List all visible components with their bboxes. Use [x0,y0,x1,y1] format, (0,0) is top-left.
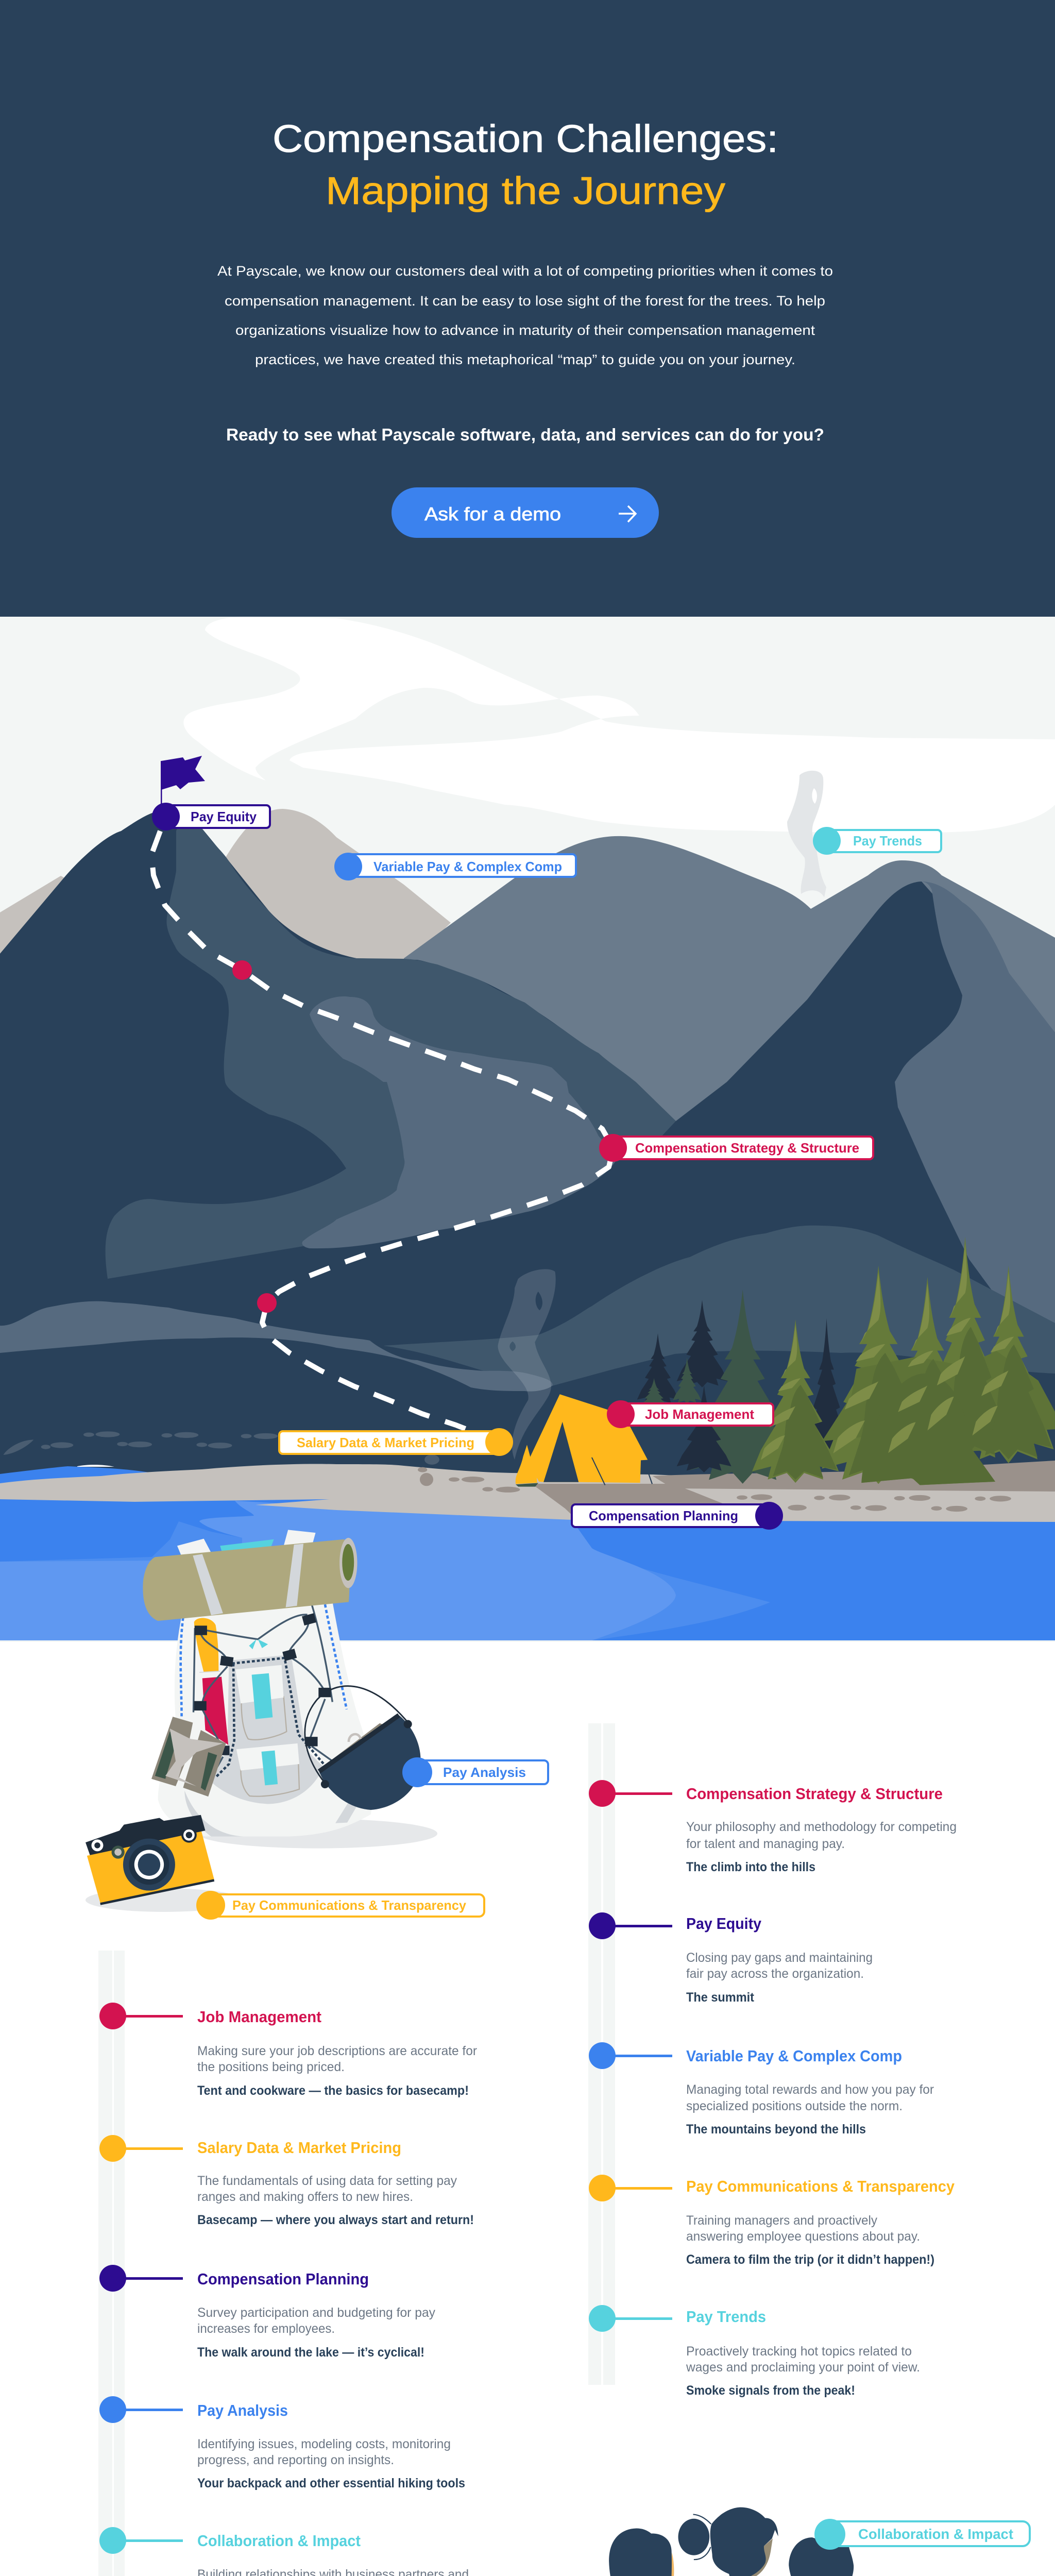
tan peak [206,809,451,969]
mid hill behind forest [383,1226,1055,1386]
center neck [720,2538,773,2576]
label: Pay Analysis: Pay Analysis [443,1765,526,1780]
footprints on dark ground [4,1431,439,1465]
item: Pay Equity: fair pay across the organization. [686,1967,864,1981]
label: Compensation Strategy [599,1134,873,1162]
demo button [392,487,659,538]
shore [0,1464,1055,1522]
left dark mountain [0,810,676,1494]
label: Compensation Strategy: Compensation Strategy & Structure [635,1140,859,1156]
olive pines [752,1236,1054,1485]
label: Salary Data [279,1428,513,1456]
side strap [184,1791,359,1837]
camp ground patch [532,1484,731,1520]
pocket strap top [252,1673,273,1719]
call to action text: Ready to see what Payscale software, data, and services can do for you? [226,425,824,444]
item: Job Management: the positions being priced. [197,2060,345,2074]
right dark mountain [618,882,1055,1494]
bun head [678,2507,778,2576]
item: Salary Data: Salary Data & Market Pricing [197,2139,401,2157]
panel: left column list [98,1951,477,2576]
intro paragraph [217,263,833,367]
bedroll straps [193,1544,303,1615]
item: Compensation Strategy: for talent and managing pay. [686,1837,845,1851]
item: Pay Trends: Pay Trends [686,2308,766,2326]
intro paragraph: practices, we have created this metaphorical “map” to guide you on your journey. [255,352,795,367]
item: Job Management: Tent and cookware — the basics for basecamp! [197,2083,469,2098]
campfire [516,1445,537,1484]
icon: arrow [619,506,636,522]
label: Pay Trends: Pay Trends [853,833,922,849]
title [273,117,778,212]
pocket strap bottom [262,1751,278,1785]
left water sliver [0,1466,149,1486]
forest details [761,1244,1052,1485]
green pines [639,1290,795,1484]
item: Pay Trends [589,2305,920,2398]
item: Variable Pay: specialized positions outside the norm. [686,2099,903,2113]
item: Compensation Strategy: The climb into the hills [686,1860,815,1874]
stitching: blue [181,1604,347,1717]
item: Variable Pay: The mountains beyond the hills [686,2122,866,2137]
item: Variable Pay [589,2042,934,2137]
camera body [87,1829,214,1903]
item: Pay Analysis: progress, and reporting on insights. [197,2453,394,2467]
item: Salary Data: The fundamentals of using data for setting pay [197,2174,457,2188]
item: Pay Equity: Closing pay gaps and maintaining [686,1951,873,1965]
cyan tag [249,1639,268,1649]
cords [194,1604,332,1770]
shadow [198,1819,437,1849]
camp smoke [498,1269,556,1460]
camera top [86,1815,205,1855]
item: Pay Analysis: Your backpack and other essential hiking tools [197,2476,465,2490]
bedroll [143,1539,349,1621]
item: Pay Communications: Camera to film the trip (or it didn’t happen!) [686,2252,934,2267]
icon: summit flag [161,756,205,807]
illustration: people [584,2507,904,2576]
label: Compensation Planning: Compensation Planning [589,1508,738,1523]
back mountain [0,876,206,979]
illustration: camera [86,1815,242,1912]
item: Pay Equity: The summit [686,1990,755,2005]
pack body [158,1601,372,1837]
item: Job Management: Job Management [197,2008,321,2026]
item: Salary Data: ranges and making offers to new hires. [197,2190,413,2204]
item: Compensation Planning: increases for employees. [197,2321,335,2336]
item: Job Management [99,2003,477,2098]
item: Collaboration: Collaboration & Impact [197,2532,361,2550]
pocket bottom [241,1764,299,1797]
item: Pay Communications: Pay Communications & Transparency [686,2177,955,2195]
item: Compensation Planning: The walk around the lake — it’s cyclical! [197,2345,424,2360]
footprints on shore [418,1467,1011,1512]
item: Variable Pay: Managing total rewards and how you pay for [686,2082,934,2097]
lake [0,1484,1055,1640]
forest [637,1236,1054,1485]
icon: smoke signal [787,771,826,897]
right head [789,2537,854,2576]
item: Pay Communications [589,2175,955,2267]
yellow item [194,1618,218,1672]
pot lid [334,1723,386,1759]
item: Salary Data [99,2135,474,2227]
item: Compensation Strategy: Your philosophy and methodology for competing [686,1820,957,1834]
item: Compensation Planning: Survey participation and budgeting for pay [197,2306,435,2320]
camera lens [123,1839,175,1891]
sky [0,617,1055,1642]
label: Variable Pay: Variable Pay & Complex Comp [373,859,562,874]
label: Pay Equity [152,803,270,831]
center panel [211,1655,324,1804]
item: Pay Communications: answering employee questions about pay. [686,2229,920,2244]
olive forest mass [822,1351,1055,1454]
dark shore [653,1461,1055,1492]
intro paragraph: organizations visualize how to advance in maturity of their compensation management [235,323,815,338]
label: Pay Analysis [402,1757,548,1787]
trail marker: hills [232,960,252,980]
label: Pay Communications [196,1891,484,1920]
binoculars [151,1717,226,1797]
label: Pay Equity: Pay Equity [191,809,257,824]
item: Pay Trends: wages and proclaiming your point of view. [686,2360,920,2375]
item: Pay Analysis: Identifying issues, modeling costs, monitoring [197,2437,451,2451]
intro paragraph: At Payscale, we know our customers deal with a lot of competing priorities when it comes to [217,263,833,279]
trail [151,831,613,1442]
item: Pay Equity [589,1912,873,2005]
pot handle [305,1686,410,1783]
lake mid-blue shapes [0,1521,770,1640]
label: Collaboration [814,2519,1030,2550]
title: Compensation Challenges: [273,117,778,160]
pot [319,1715,421,1810]
olive highlights [761,1244,1014,1460]
red panel [202,1677,228,1745]
grey mountain range [404,836,1055,1236]
pocket top [242,1697,286,1740]
intro paragraph: compensation management. It can be easy to lose sight of the forest for the trees. To help [225,293,825,309]
item: Pay Trends: Proactively tracking hot topics related to [686,2344,912,2359]
label: Compensation Planning [572,1502,783,1530]
right mountain light face [895,882,1055,1323]
label: Job Management [607,1400,773,1428]
tent and campfire [516,1394,652,1487]
low mist band [0,1301,553,1392]
ponytail hair [609,2529,672,2576]
mid-tone ridge [106,824,676,1279]
item: Pay Analysis: Pay Analysis [197,2401,288,2419]
label: Collaboration: Collaboration & Impact [858,2526,1013,2542]
header panel [0,0,1055,617]
label: Pay Trends [813,827,941,855]
item: Pay Equity: Pay Equity [686,1914,762,1933]
title: Mapping the Journey [326,169,726,212]
tent [528,1394,648,1483]
item: Collaboration [99,2527,469,2576]
item: Compensation Strategy [589,1780,957,1874]
item: Compensation Planning [99,2265,435,2360]
item: Variable Pay: Variable Pay & Complex Comp [686,2047,902,2065]
item: Salary Data: Basecamp — where you always start and return! [197,2213,474,2227]
dark pines [637,1300,848,1461]
label: Variable Pay [334,853,576,880]
item: Compensation Planning: Compensation Planning [197,2270,369,2288]
label: Salary Data: Salary Data & Market Pricing [297,1435,474,1450]
item: Compensation Strategy: Compensation Strategy & Structure [686,1785,943,1803]
olive shadows [773,1327,1052,1485]
camera shadow [86,1888,242,1912]
label: Job Management: Job Management [645,1406,754,1422]
track [588,1723,615,2385]
cinches [194,1613,331,1755]
white cloud [183,617,1055,833]
trail marker: lower bend [257,1293,277,1313]
item: Job Management: Making sure your job descriptions are accurate for [197,2044,477,2058]
tent opening [543,1422,578,1482]
item: Pay Trends: Smoke signals from the peak! [686,2383,855,2398]
panel: right column list [588,1723,957,2398]
top flaps [177,1530,316,1560]
track [98,1951,125,2576]
bedroll end [339,1538,358,1588]
item: Pay Communications: Training managers and proactively [686,2213,877,2228]
illustration: backpack [143,1530,437,1849]
panel: mountain map [0,617,1055,1642]
stitching: dark [216,1657,325,1777]
label: Pay Communications: Pay Communications & Transparency [232,1897,467,1913]
demo button: Ask for a demo [424,503,561,524]
lake light shape [0,1501,676,1640]
item: Pay Analysis [99,2396,465,2490]
ponytail ear [670,2552,674,2576]
trail shade [302,996,616,1248]
